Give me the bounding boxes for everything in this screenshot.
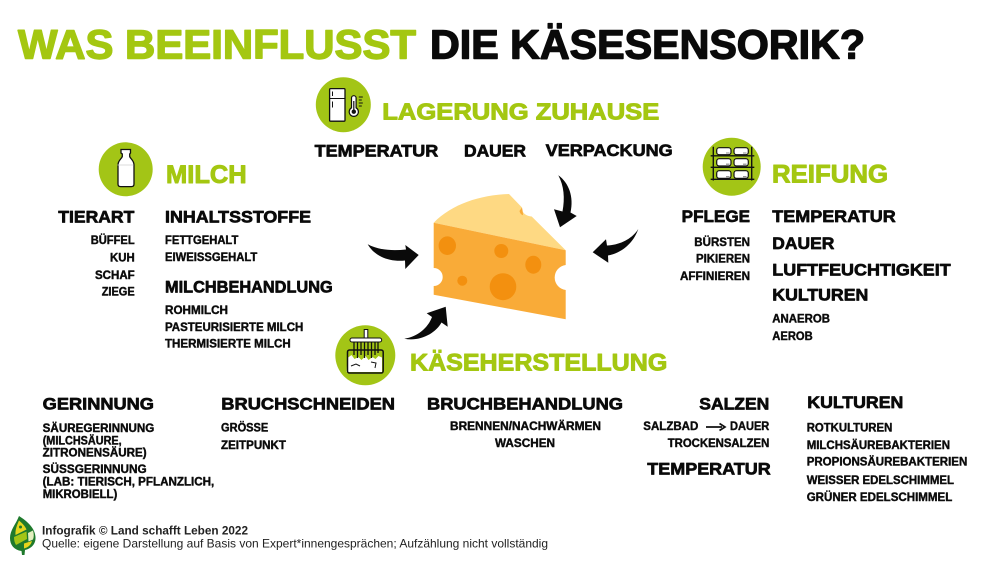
title	[18, 22, 865, 68]
list: tierart: SCHAF	[95, 269, 135, 282]
title: DIE KÄSESENSORIK?	[430, 22, 865, 68]
list: pflege: PFLEGE	[682, 207, 750, 226]
list: tierart: KUH	[110, 251, 135, 264]
list: pflege: PIKIEREN	[696, 253, 750, 266]
list: reifung factors: KULTUREN	[772, 286, 868, 304]
arrow: salzbad to dauer	[706, 424, 725, 430]
icon: leaf logo	[10, 516, 36, 555]
credit: Infografik © Land schafft Leben 2022	[42, 524, 248, 538]
list: tierart: BÜFFEL	[91, 234, 135, 247]
icon: milk bottle	[99, 142, 153, 196]
list: inhaltsstoffe: EIWEISSGEHALT	[165, 251, 257, 264]
factors: lagerung: TEMPERATUR	[315, 142, 438, 160]
icon: curd cutter	[335, 325, 395, 385]
list: kulturen: WEISSER EDELSCHIMMEL	[807, 474, 954, 487]
list: milchbehandlung: PASTEURISIERTE MILCH	[165, 321, 303, 334]
list: pflege	[680, 207, 750, 283]
heading: reifung: REIFUNG	[772, 161, 888, 189]
factors: lagerung: DAUER	[464, 142, 526, 160]
list: reifung factors: AEROB	[772, 330, 813, 343]
list: pflege: AFFINIEREN	[680, 270, 750, 283]
list: salzen: SALZBAD	[643, 420, 698, 433]
list: reifung factors: ANAEROB	[772, 313, 830, 326]
list: salzen: SALZEN	[699, 394, 769, 414]
list: salzen	[643, 394, 771, 478]
panel: reifung	[680, 138, 951, 343]
arrow: from käseherstellung	[404, 307, 448, 339]
panel: milch	[58, 142, 333, 350]
list: gerinnung: (MILCHSÄURE,	[43, 435, 122, 448]
list: kulturen: MILCHSÄUREBAKTERIEN	[807, 439, 950, 452]
list: pflege: BÜRSTEN	[694, 236, 750, 249]
list: bruchbehandlung: WASCHEN	[495, 437, 555, 450]
list: salzen: TEMPERATUR	[647, 460, 771, 478]
factors: lagerung	[315, 141, 673, 160]
list: inhaltsstoffe: FETTGEHALT	[165, 234, 238, 247]
footer	[10, 516, 548, 555]
list: gerinnung: ZITRONENSÄURE)	[43, 447, 147, 460]
list: gerinnung: MIKROBIELL)	[43, 488, 117, 501]
list: kulturen: PROPIONSÄUREBAKTERIEN	[807, 456, 967, 469]
title: WAS BEEINFLUSST	[18, 22, 416, 68]
list: kulturen: KULTUREN	[807, 393, 903, 412]
arrow: from milch	[368, 244, 419, 269]
list: inhaltsstoffe: INHALTSSTOFFE	[165, 208, 311, 226]
list: milchbehandlung: MILCHBEHANDLUNG	[165, 278, 333, 296]
heading: lagerung zuhause: LAGERUNG ZUHAUSE	[382, 99, 659, 125]
factors: lagerung: VERPACKUNG	[546, 141, 673, 160]
list: gerinnung: (LAB: TIERISCH, PFLANZLICH,	[43, 476, 214, 489]
heading: milch: MILCH	[166, 161, 247, 189]
icon: cheese shelf	[703, 138, 761, 196]
list: bruchschneiden: GRÖSSE	[221, 422, 269, 435]
heading: käseherstellung: KÄSEHERSTELLUNG	[410, 350, 667, 377]
arrow: from reifung	[593, 229, 638, 263]
list: milchbehandlung: THERMISIERTE MILCH	[165, 338, 291, 351]
list: milchbehandlung	[165, 278, 333, 350]
panel: käseherstellung	[43, 325, 967, 504]
list: gerinnung: SÜSSGERINNUNG	[43, 463, 147, 476]
list: bruchschneiden: BRUCHSCHNEIDEN	[221, 394, 395, 414]
list: gerinnung: GERINNUNG	[43, 394, 154, 414]
list: tierart: TIERART	[58, 208, 135, 226]
cheese illustration	[434, 194, 566, 319]
icon: fridge and thermometer	[316, 77, 371, 132]
list: kulturen: GRÜNER EDELSCHIMMEL	[807, 491, 952, 504]
list: gerinnung	[43, 394, 214, 501]
list: bruchbehandlung	[427, 394, 623, 450]
list: bruchbehandlung: BRUCHBEHANDLUNG	[427, 394, 623, 414]
list: salzen: TROCKENSALZEN	[668, 437, 769, 450]
arrow: from lagerung	[554, 175, 577, 227]
source: Quelle: eigene Darstellung auf Basis von Expert*innengesprächen; Aufzählung nicht vollständig	[42, 536, 548, 550]
list: bruchschneiden: ZEITPUNKT	[221, 439, 286, 452]
list: bruchbehandlung: BRENNEN/NACHWÄRMEN	[450, 420, 601, 433]
list: bruchschneiden	[221, 394, 395, 452]
list: reifung factors: LUFTFEUCHTIGKEIT	[772, 260, 951, 280]
list: gerinnung: SÄUREGERINNUNG	[43, 422, 154, 435]
list: inhaltsstoffe	[165, 208, 311, 264]
list: tierart	[58, 208, 135, 298]
list: salzen: DAUER	[730, 420, 770, 433]
list: kulturen: ROTKULTUREN	[807, 422, 892, 435]
list: reifung factors: TEMPERATUR	[772, 207, 896, 226]
list: tierart: ZIEGE	[102, 286, 135, 299]
list: reifung factors: DAUER	[772, 234, 834, 253]
list: reifung factors	[772, 207, 951, 343]
panel: lagerung zuhause	[315, 77, 673, 160]
list: milchbehandlung: ROHMILCH	[165, 304, 228, 317]
list: kulturen	[807, 393, 967, 504]
